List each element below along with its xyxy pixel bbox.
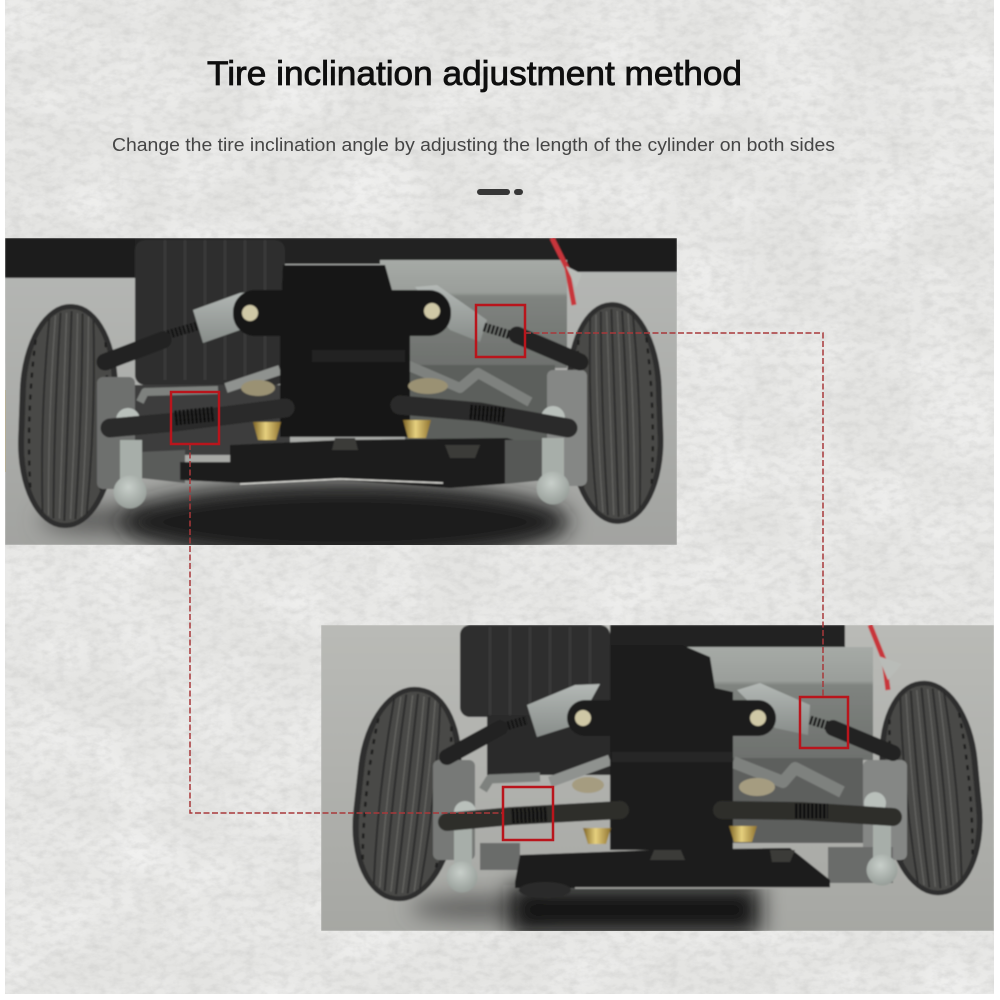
left upper arm upper: [192, 291, 246, 344]
studio backdrop upper: [5, 238, 677, 562]
right upper arm lower: [737, 683, 810, 735]
upper threaded rods lower: [500, 720, 833, 728]
lower tie links upper: [110, 405, 568, 428]
central tower lower: [610, 645, 733, 850]
rear battery block lower: [460, 625, 845, 775]
upper tie links upper: [105, 335, 580, 362]
upper mounting plate lower: [567, 700, 776, 736]
gray steering levers upper: [140, 365, 530, 402]
studio backdrop lower: [321, 625, 994, 935]
motor lower: [682, 647, 873, 843]
right tire lower: [878, 680, 984, 896]
lower chassis plate lower: [515, 848, 830, 898]
gray steering levers lower: [483, 760, 842, 792]
wire terminal lower: [880, 656, 890, 680]
screws and brass posts lower: [572, 777, 775, 844]
right tire upper: [564, 301, 666, 525]
tower seam lower: [612, 752, 732, 762]
red wire lower: [870, 625, 888, 690]
callout boxes: lower photo: [503, 697, 848, 840]
left tire lower: [352, 686, 462, 902]
right upper arm upper: [415, 285, 487, 342]
photo: upper car front view: [5, 238, 677, 562]
upper tie links lower: [447, 728, 893, 757]
left upper arm lower: [527, 684, 600, 737]
accent sliver at left edge: [5, 390, 6, 472]
upper mounting plate upper: [233, 290, 451, 336]
tower seam upper: [312, 350, 405, 362]
left tire upper: [15, 302, 121, 530]
wheel hubs lower: [433, 760, 907, 860]
lower chassis plate upper: [140, 438, 545, 488]
screws and brass posts upper: [241, 378, 448, 440]
photo: lower car front view: [321, 625, 994, 935]
connector: dashed line between left-side cylinders: [190, 444, 503, 813]
central tower upper: [280, 265, 410, 437]
wire terminal upper: [565, 266, 578, 278]
upper threaded rods upper: [160, 326, 517, 337]
title: Tire inclination adjustment method: [207, 55, 742, 93]
connector: dashed line between right-side cylinders: [525, 333, 823, 697]
decorative dash marker: [477, 189, 523, 195]
lower tie links lower: [447, 810, 893, 822]
lower threaded rods lower: [512, 811, 828, 816]
rear battery block upper: [135, 240, 290, 455]
callout boxes: upper photo: [171, 305, 525, 444]
wheel hubs upper: [97, 370, 587, 489]
motor upper: [380, 260, 567, 450]
lower threaded rods upper: [175, 412, 505, 418]
ball studs upper: [114, 406, 570, 508]
red wire upper: [552, 238, 574, 305]
subtitle: Change the tire inclination angle by adjusting the length of the cylinder on both sides: [112, 134, 835, 155]
chassis base lower: [480, 843, 893, 883]
ball studs lower: [446, 792, 898, 892]
